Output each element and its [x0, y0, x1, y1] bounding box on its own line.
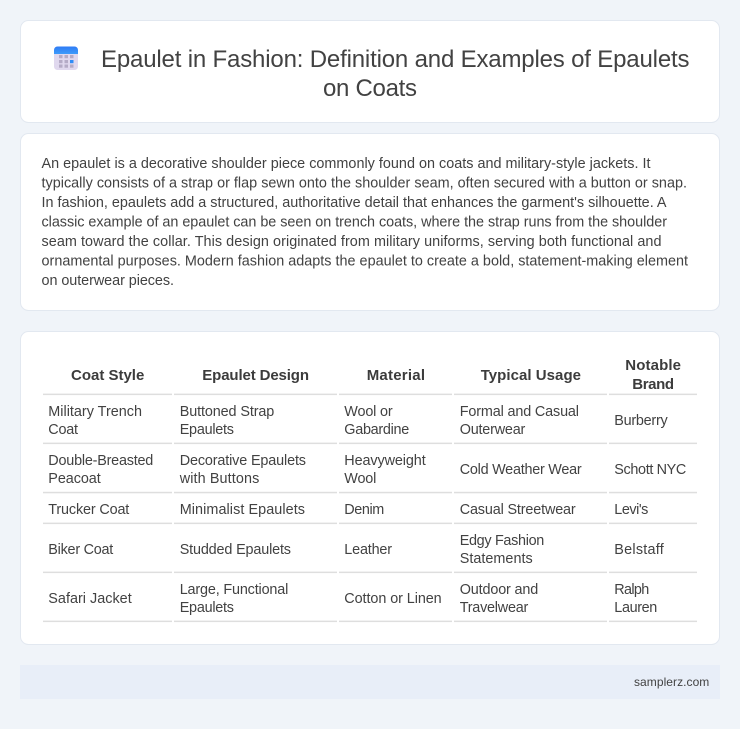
- text block: definition: on outerwear pieces.: [42, 273, 174, 289]
- table row: Military Trench Coat: Military Trench: [48, 404, 142, 420]
- title: [101, 46, 690, 102]
- table row: Double-Breasted Peacoat: Cold Weather Wear: [460, 462, 582, 478]
- panel: definition text: [20, 134, 720, 310]
- text block: definition: An epaulet is a decorative shoulder piece commonly found on coats and military-style jackets. It: [42, 156, 650, 172]
- text block: definition: [42, 156, 688, 289]
- table row: Military Trench Coat: Formal and Casual: [460, 404, 579, 420]
- table row: Military Trench Coat: Burberry: [614, 413, 668, 429]
- table row: Trucker Coat: Levi's: [614, 502, 648, 518]
- title: on Coats: [323, 75, 417, 102]
- table row: Double-Breasted Peacoat: [43, 453, 697, 493]
- table row: Safari Jacket: Outdoor and: [460, 582, 538, 598]
- table row: Military Trench Coat: Buttoned Strap: [180, 404, 274, 420]
- table row: Biker Coat: Statements: [460, 551, 533, 567]
- table row: Safari Jacket: Travelwear: [460, 600, 529, 616]
- table header: Typical Usage: [481, 367, 581, 384]
- table row: Biker Coat: Studded Epaulets: [180, 542, 291, 558]
- panel: table card: [20, 332, 720, 644]
- table row: Biker Coat: [43, 533, 697, 573]
- panel: title card: [20, 20, 720, 122]
- title: Epaulet in Fashion: Definition and Examples of Epaulets: [101, 46, 690, 73]
- text block: definition: seam toward the collar. This design originated from military uniforms, serving both functional and: [42, 234, 662, 250]
- table row: Double-Breasted Peacoat: Schott NYC: [614, 462, 686, 478]
- table row: Military Trench Coat: Gabardine: [344, 422, 409, 438]
- table row: Double-Breasted Peacoat: Double-Breasted: [48, 453, 153, 469]
- table row: Trucker Coat: Minimalist Epaulets: [180, 502, 305, 518]
- table row: Safari Jacket: Lauren: [614, 600, 657, 616]
- table row: Safari Jacket: Large, Functional: [180, 582, 288, 598]
- table header: Coat Style: [71, 367, 144, 384]
- table row: Double-Breasted Peacoat: Heavyweight: [344, 453, 426, 469]
- table row: Trucker Coat: Denim: [344, 502, 384, 518]
- table row: Biker Coat: Leather: [344, 542, 392, 558]
- table row: Trucker Coat: Trucker Coat: [48, 502, 129, 518]
- text block: definition: ornamental purposes. Modern fashion adapts the epaulet to create a bold, statement-making element: [42, 254, 688, 270]
- table row: Trucker Coat: Casual Streetwear: [460, 502, 576, 518]
- table row: Biker Coat: Belstaff: [614, 542, 665, 558]
- table row: Biker Coat: Biker Coat: [48, 542, 113, 558]
- table row: Military Trench Coat: Coat: [48, 422, 78, 438]
- table row: Safari Jacket: Ralph: [614, 582, 649, 598]
- table row: Military Trench Coat: Wool or: [344, 404, 393, 420]
- table row: Safari Jacket: [43, 582, 697, 622]
- table row: Biker Coat: Edgy Fashion: [460, 533, 544, 549]
- table row: Military Trench Coat: Outerwear: [460, 422, 526, 438]
- table row: Safari Jacket: Safari Jacket: [48, 591, 132, 607]
- table header: Epaulet Design: [202, 367, 309, 384]
- footer: samplerz.com: [634, 675, 709, 689]
- text block: definition: typically consists of a strap or flap sewn onto the shoulder seam, often secured with a button or snap.: [42, 176, 687, 192]
- table row: Safari Jacket: Cotton or Linen: [344, 591, 442, 607]
- text block: definition: classic example of an epaulet can be seen on trench coats, where the strap runs from the shoulder: [42, 214, 667, 230]
- table row: Double-Breasted Peacoat: Peacoat: [48, 471, 101, 487]
- table header: Material: [367, 367, 425, 384]
- table row: Military Trench Coat: Epaulets: [180, 422, 234, 438]
- icon: calendar: [54, 46, 78, 70]
- table header: Brand: [632, 376, 674, 393]
- table row: Double-Breasted Peacoat: Decorative Epaulets: [180, 453, 306, 469]
- text block: definition: In fashion, epaulets add a structured, authoritative detail that enhances the garment's silhouette. A: [42, 195, 667, 211]
- table row: Double-Breasted Peacoat: Wool: [344, 471, 376, 487]
- footer: [20, 665, 720, 699]
- table row: Double-Breasted Peacoat: with Buttons: [179, 471, 259, 487]
- table header: [43, 357, 697, 395]
- table row: Safari Jacket: Epaulets: [180, 600, 234, 616]
- table header: Notable: [625, 357, 681, 374]
- table row: Military Trench Coat: [43, 404, 697, 444]
- table row: Trucker Coat: [43, 502, 697, 524]
